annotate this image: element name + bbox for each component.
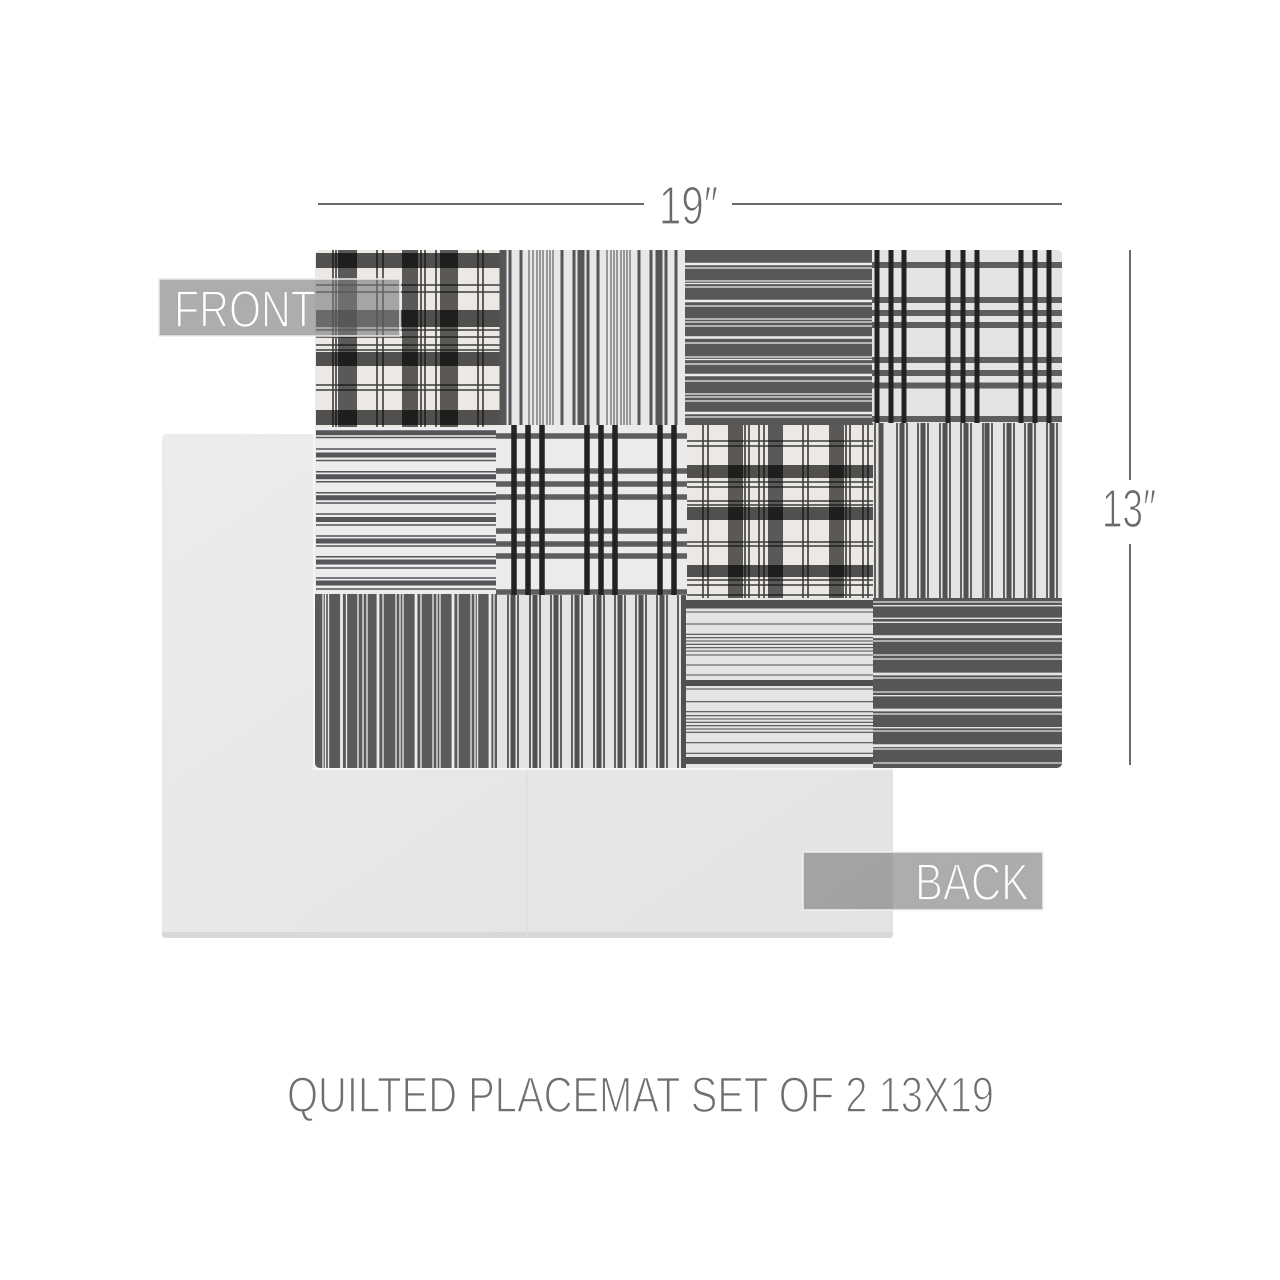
label: BACK: BACK bbox=[915, 854, 1029, 912]
label: BACK bbox=[803, 852, 1043, 912]
patch: vertical stripes bottom middle bbox=[497, 595, 686, 768]
patch: windowpane top right bbox=[872, 250, 1062, 423]
patch: dark horizontal stripes bottom right bbox=[873, 598, 1062, 768]
dimension: height 13 inches: 13″ bbox=[1102, 479, 1156, 539]
patch: horizontal stripes middle left bbox=[316, 427, 496, 595]
back placemat bbox=[162, 434, 893, 938]
title: QUILTED PLACEMAT SET OF 2 13X19 bbox=[287, 1067, 994, 1123]
patch: vertical stripes middle right bbox=[873, 423, 1062, 598]
patch: large plaid centre bbox=[687, 425, 873, 598]
patch: windowpane middle bbox=[496, 425, 687, 595]
label: FRONT: FRONT bbox=[174, 281, 316, 339]
patch: vertical stripes top row bbox=[500, 250, 685, 425]
patch: dark horizontal stripes top row bbox=[685, 250, 873, 425]
front placemat: patchwork bbox=[313, 248, 1065, 770]
patch: dark vertical stripes bottom left bbox=[315, 594, 497, 768]
patch: large plaid top left bbox=[316, 250, 500, 427]
patch: horizontal stripes bottom bbox=[686, 598, 873, 768]
dimension: width 19 inches: 19″ bbox=[659, 176, 718, 236]
